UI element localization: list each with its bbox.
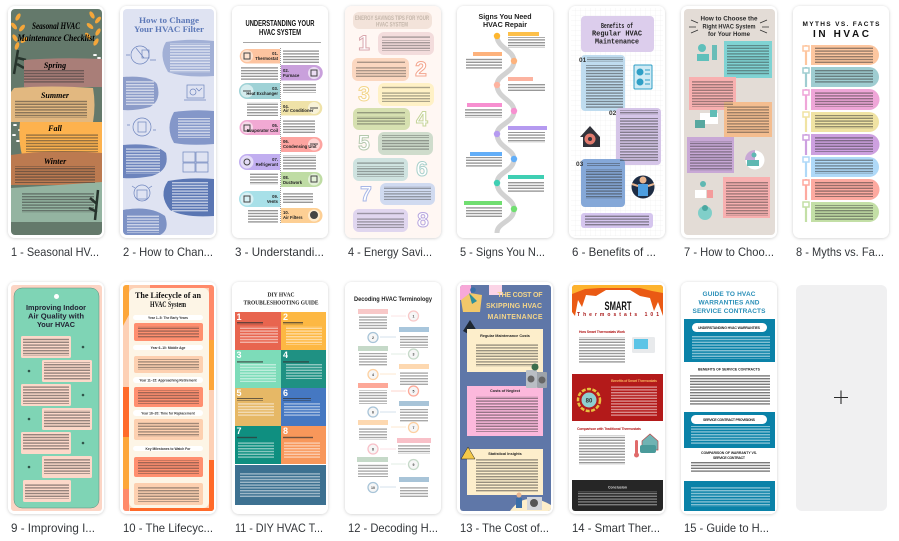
big numerals: 5: [358, 132, 370, 155]
labels: second row: 11 - DIY HVAC T...: [235, 521, 323, 535]
title: How to Choose the: [700, 16, 758, 22]
tip boxes: [352, 32, 435, 232]
pill labels: 08.: [283, 175, 289, 180]
section headings: How Smart Thermostats Work: [579, 330, 625, 334]
illustrations: [695, 44, 764, 220]
section headings: Fall: [47, 124, 63, 133]
band: winter: [11, 151, 102, 185]
labels: second row: 15 - Guide to H...: [684, 521, 769, 535]
title: SMART: [604, 299, 632, 313]
title: [802, 21, 880, 40]
leaf: dark left: [14, 50, 26, 74]
title: Seasonal HVAC: [32, 21, 81, 31]
connector dots: [28, 346, 84, 468]
labels: first row: 1 - Seasonal HV...: [11, 245, 99, 259]
title: Benefits of: [601, 23, 633, 31]
stage names: Year 11–15: Approaching Retirement: [139, 378, 198, 382]
band: fall: [19, 122, 102, 155]
section headings: UNDERSTANDING HVAC WARRANTIES: [698, 326, 761, 330]
title: Regular HVAC: [592, 30, 642, 38]
myth pills: [811, 45, 880, 222]
big numerals: 3: [358, 83, 370, 106]
numbered circles: [368, 311, 418, 492]
circle numbers: 3: [413, 352, 415, 356]
section headings: Spring: [44, 61, 66, 70]
card 4: energy savings tips thumbnail: [345, 6, 441, 238]
title: [17, 22, 95, 41]
band: summer: [11, 86, 94, 122]
section text lines: [690, 335, 770, 507]
title: UNDERSTANDING YOUR: [246, 19, 315, 28]
labels: first row: [11, 245, 884, 259]
big numerals: 4: [416, 108, 428, 131]
header box: [581, 16, 654, 52]
circle numbers: 8: [372, 447, 374, 451]
circle numbers: 10: [371, 486, 375, 490]
labels: first row: 2 - How to Chan...: [123, 245, 213, 259]
big numerals: [358, 32, 429, 232]
pill labels: Refrigerant: [256, 162, 279, 167]
card 6: benefits of maintenance thumbnail: [569, 6, 665, 238]
title: Air Quality with: [28, 312, 84, 320]
conclusion heading: Conclusion: [608, 486, 627, 490]
info text lines: [690, 45, 769, 216]
steps grid: [235, 312, 326, 505]
labels: second row: [11, 521, 769, 535]
circle numbers: 4: [372, 373, 374, 377]
labels: first row: 4 - Energy Savi...: [348, 245, 432, 259]
section headings: Comparison with Traditional Thermostats: [577, 427, 641, 431]
box headings: [480, 334, 530, 456]
section headings: SERVICE CONTRACT: [713, 456, 746, 460]
title: DIY HVAC: [268, 292, 295, 298]
conclusion text lines: [578, 491, 657, 506]
labels: first row: 6 - Benefits of ...: [572, 245, 656, 259]
waypoints: [494, 33, 517, 212]
labels: first row: 7 - How to Choo...: [684, 245, 774, 259]
stage names: Year 1–5: The Early Years: [148, 316, 188, 320]
tip text lines: [356, 35, 431, 228]
card 11: DIY troubleshooting thumbnail: [232, 282, 328, 514]
pill labels: Vents: [267, 199, 279, 204]
section headings: SERVICE CONTRACT PROVISIONS: [703, 418, 756, 422]
box numbers: 01: [579, 57, 587, 64]
blob text lines: [126, 43, 210, 233]
title: Signs You Need: [478, 14, 532, 21]
box numbers: 02: [609, 110, 617, 117]
red benefits panel: [572, 374, 663, 421]
big numerals: 8: [417, 209, 429, 232]
section headings: Summer: [41, 91, 70, 100]
pill labels: Furnace: [283, 73, 300, 78]
labels: second row: 10 - The Lifecyc...: [123, 521, 213, 535]
pill labels: Air Conditioner: [283, 108, 314, 113]
icon: technician: [632, 176, 654, 198]
pill labels: 02.: [283, 68, 289, 73]
myth text lines: [815, 47, 873, 220]
card 5: signs you need repair thumbnail: [457, 6, 553, 238]
title: HVAC SYSTEM: [376, 22, 408, 28]
timeline rails: [805, 45, 807, 222]
term text lines: [358, 316, 430, 497]
white pills: [691, 323, 767, 424]
title: [700, 16, 758, 38]
line icons: [126, 46, 208, 201]
box headings: Costs of Neglect: [490, 389, 521, 393]
title: [244, 292, 318, 306]
text lines: [15, 70, 98, 213]
title: [692, 291, 766, 315]
gauge: [578, 389, 600, 411]
title: HVAC SYSTEM: [259, 28, 301, 37]
card 3: understanding hvac thumbnail: [232, 6, 328, 238]
title: SERVICE CONTRACTS: [692, 308, 766, 315]
title: MYTHS VS. FACTS: [802, 21, 880, 28]
title: [26, 303, 86, 329]
warning sign: [461, 447, 475, 459]
term labels: [357, 309, 431, 482]
title: [134, 17, 204, 32]
card 12: decoding terminology thumbnail: [345, 282, 441, 514]
stage names: [139, 316, 198, 451]
pill labels: 06.: [283, 139, 289, 144]
icon: air conditioner: [634, 65, 652, 89]
box text lines: [585, 57, 658, 226]
card 13: cost of skipping thumbnail: [457, 282, 553, 514]
circle numbers: 9: [413, 463, 415, 467]
gauge: 80: [586, 398, 593, 404]
title: [135, 291, 202, 309]
benefit boxes: [581, 55, 661, 228]
illustration: worker top left: [460, 285, 502, 312]
title: [486, 292, 543, 321]
band: spring: [24, 58, 102, 87]
title: TROUBLESHOOTING GUIDE: [244, 300, 318, 306]
pill labels: Air Filters: [283, 215, 303, 220]
title: THE COST OF: [498, 292, 543, 299]
title: Decoding HVAC Terminology: [354, 296, 432, 303]
sign text lines: [465, 37, 545, 217]
content boxes: [467, 329, 543, 495]
box numbers: 03: [576, 161, 584, 168]
title: Your HVAC: [37, 320, 76, 329]
step numbers: 2: [283, 312, 288, 322]
title: [355, 16, 429, 28]
title: The Lifecycle of an: [135, 291, 202, 300]
box headings: Statistical Insights: [488, 452, 522, 456]
step text lines: [237, 322, 322, 498]
big numerals: 7: [360, 183, 372, 206]
text lines: [579, 337, 625, 465]
zigzag path: [497, 36, 514, 233]
title: WARRANTIES AND: [698, 300, 760, 306]
big numerals: 6: [416, 158, 428, 181]
step numbers: 8: [283, 426, 288, 436]
circle numbers: 6: [372, 410, 374, 414]
stage text lines: [138, 326, 199, 502]
stage boxes: [134, 323, 203, 505]
description lines: [241, 49, 319, 223]
pill labels: 05.: [272, 123, 278, 128]
pill labels: 10.: [283, 210, 289, 215]
section headings: COMPARISON OF WARRANTY VS.: [701, 451, 757, 455]
labels: second row: 12 - Decoding H...: [348, 521, 438, 535]
pill labels: Thermostat: [255, 56, 279, 61]
timeline squares: [803, 46, 809, 207]
leaf: dark right: [89, 190, 98, 220]
big numerals: 1: [358, 32, 370, 55]
big numerals: 2: [415, 58, 427, 81]
card 14: smart thermostats thumbnail: [569, 282, 665, 514]
band: closing note: [11, 182, 102, 222]
title: Right HVAC System: [702, 24, 756, 30]
card 2: how to change filter thumbnail: [120, 6, 216, 238]
section headings: [41, 61, 70, 166]
info boxes: [687, 41, 772, 218]
labels: second row: 14 - Smart Ther...: [572, 521, 660, 535]
labels: second row: 13 - The Cost of...: [460, 521, 549, 535]
pill labels: Evaporator Coil: [247, 128, 278, 133]
card 15: warranties thumbnail: [681, 282, 777, 514]
card 8: myths vs facts thumbnail: [793, 6, 889, 238]
section headings: [577, 330, 641, 431]
circle numbers: 1: [413, 314, 415, 318]
pill labels: Condensing Unit: [283, 144, 317, 149]
box headings: Regular Maintenance Costs: [480, 334, 530, 338]
title: IN HVAC: [813, 29, 869, 40]
stage names: Year 6–10: Middle Age: [151, 346, 186, 350]
step numbers: 5: [236, 388, 242, 398]
title: HVAC System: [150, 300, 186, 309]
pill labels: 04.: [283, 104, 289, 109]
thermostat device: [632, 337, 655, 353]
circle numbers: 7: [413, 426, 415, 430]
title: HVAC Repair: [483, 22, 527, 29]
circle numbers: 5: [413, 389, 415, 393]
title: ENERGY SAVINGS TIPS FOR YOUR: [355, 16, 429, 22]
tip boxes: [21, 336, 92, 502]
title: Thermostats 101: [577, 312, 659, 318]
title: [592, 23, 642, 46]
title: Improving Indoor: [26, 303, 86, 312]
labels: first row: 3 - Understandi...: [235, 245, 324, 259]
pill labels: Ductwork: [283, 180, 303, 185]
section headings: BENEFITS OF SERVICE CONTRACTS: [698, 368, 761, 372]
outdoor AC units: [526, 364, 547, 388]
conclusion panel: [572, 480, 663, 511]
pill labels: 07.: [272, 157, 278, 162]
labels: second row: 9 - Improving I...: [11, 521, 95, 535]
section headings: [698, 326, 761, 460]
timeline pills: [239, 49, 323, 223]
icon: home thermostat: [634, 434, 658, 458]
sign labels: [464, 32, 547, 205]
card 1: seasonal checklist thumbnail: [8, 6, 104, 238]
title: for Your Home: [708, 31, 750, 38]
card 7: how to choose thumbnail: [681, 6, 777, 238]
flames header: [572, 285, 663, 316]
tip text lines: [23, 338, 90, 499]
pill labels: Heat Exchanger: [246, 91, 278, 96]
pill labels: 09.: [272, 194, 278, 199]
icon: plus: [834, 390, 848, 404]
box numbers: [576, 57, 617, 168]
step numbers: 4: [283, 350, 288, 360]
title: SKIPPING HVAC: [486, 303, 542, 310]
benefits heading: Benefits of Smart Thermostats: [611, 379, 657, 383]
connectors: [380, 316, 406, 487]
stage pills: [133, 315, 203, 451]
blobs with text: [123, 40, 214, 235]
labels: first row: 8 - Myths vs. Fa...: [796, 245, 884, 259]
step numbers: 6: [283, 388, 288, 398]
title: [246, 19, 315, 37]
circle numbers: 2: [372, 336, 374, 340]
section headings: Winter: [44, 157, 67, 166]
title: Your HVAC Filter: [134, 24, 204, 34]
title: Maintenance: [595, 38, 639, 46]
teal bands: [684, 319, 775, 511]
title: MAINTENANCE: [488, 314, 543, 321]
title: Maintenance Checklist: [17, 33, 95, 43]
illustration: bottom worker: [510, 492, 551, 511]
circle numbers: [371, 314, 415, 490]
box text lines: [476, 343, 538, 492]
step numbers: 3: [236, 350, 242, 360]
labels: first row: 5 - Signs You N...: [460, 245, 545, 259]
title: How to Change: [139, 15, 199, 25]
pill labels: 01.: [272, 51, 278, 56]
pill labels: 03.: [272, 86, 278, 91]
benefits text lines: [611, 386, 657, 416]
step numbers: 1: [236, 312, 242, 322]
title: [478, 14, 532, 29]
stage names: Key Milestones to Watch For: [146, 447, 191, 451]
card 10: lifecycle thumbnail: [120, 282, 216, 514]
card 9: indoor air quality thumbnail: [8, 282, 104, 514]
pill labels: [246, 51, 317, 220]
title: GUIDE TO HVAC: [702, 291, 756, 298]
step numbers: 7: [236, 426, 242, 436]
add page button: [796, 285, 887, 511]
stage names: Year 16–20: Time for Replacement: [141, 412, 196, 416]
step numbers: [236, 312, 288, 436]
title: [577, 302, 659, 316]
icon: house fan: [580, 126, 600, 147]
